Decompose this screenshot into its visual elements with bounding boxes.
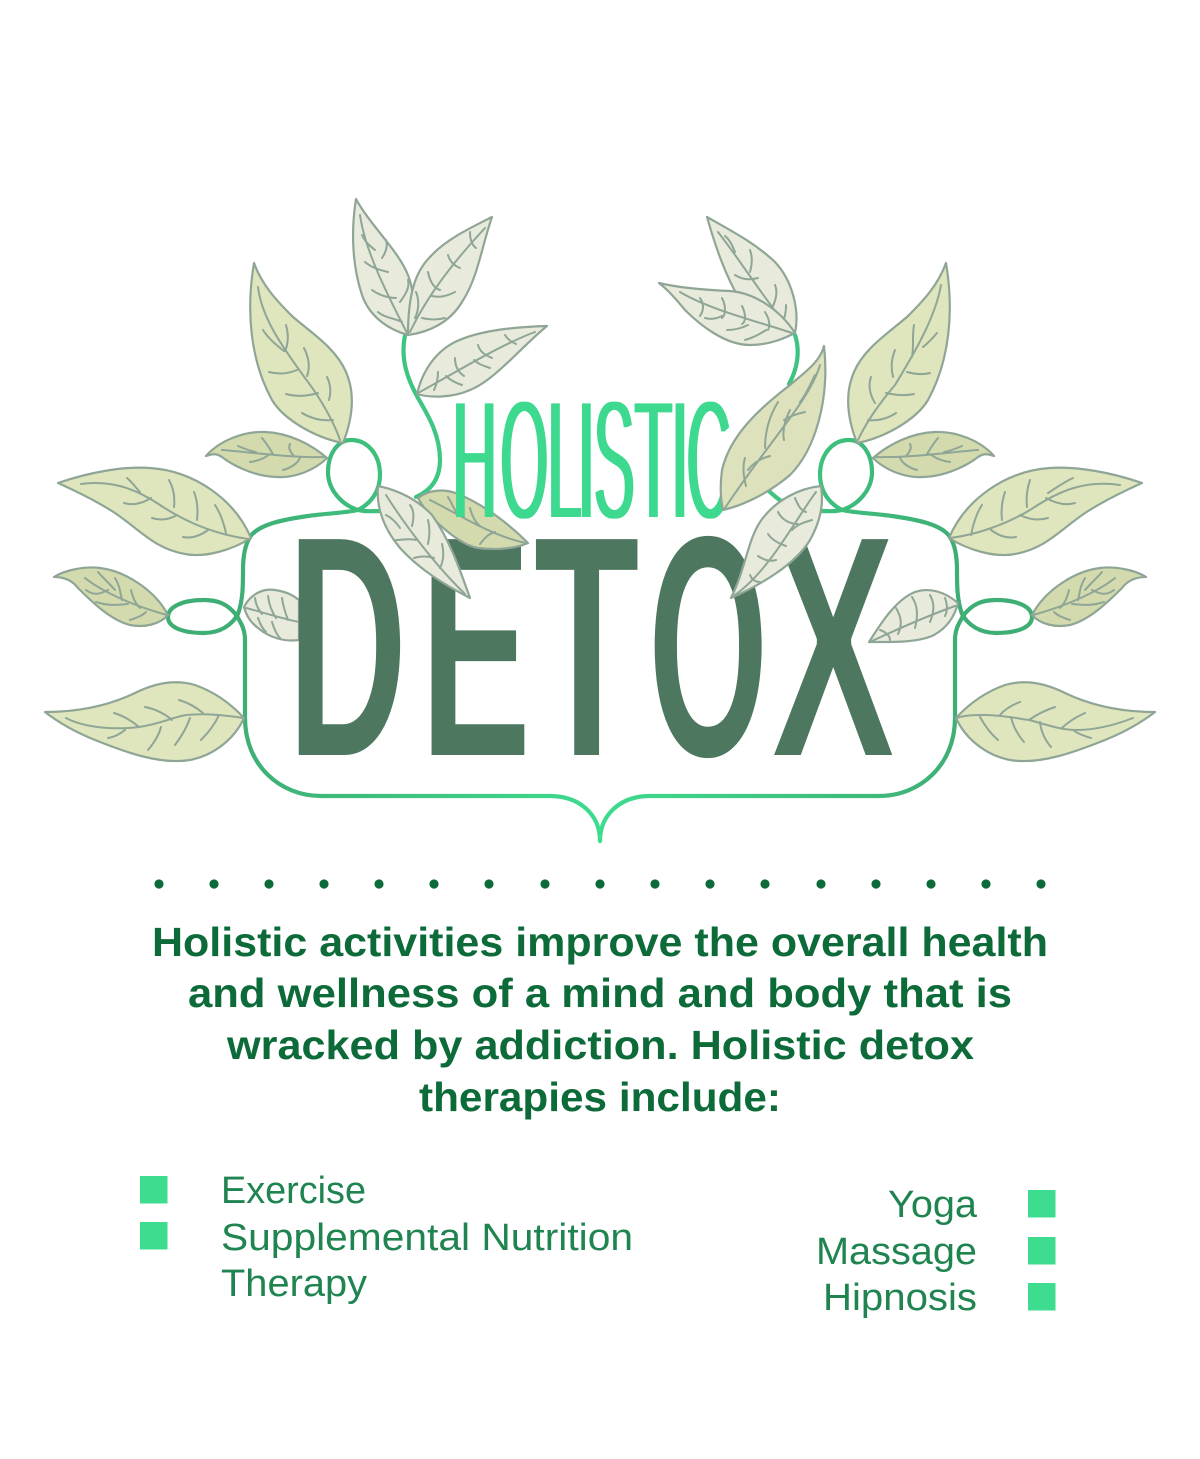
- left list: Therapy: [221, 1263, 367, 1305]
- DETOX wordmark: T: [534, 467, 639, 826]
- intro paragraph: and wellness of a mind and body that is: [188, 970, 1012, 1016]
- leaf: left middle large: [58, 468, 251, 555]
- left list: Exercise: [221, 1170, 366, 1212]
- leaf: top pair left: [353, 199, 492, 335]
- intro paragraph: therapies include:: [419, 1074, 781, 1120]
- leaf: right narrow: [1032, 567, 1146, 626]
- leaf: right middle large: [949, 468, 1142, 555]
- intro paragraph: Holistic activities improve the overall health: [152, 919, 1048, 965]
- leaf: left narrow: [54, 567, 168, 626]
- DETOX wordmark: X: [770, 467, 897, 826]
- HOLISTIC heading: HOLISTIC: [453, 366, 731, 556]
- leaf: right bottom large: [956, 682, 1155, 761]
- left list: [221, 1170, 633, 1305]
- DETOX wordmark: E: [420, 468, 531, 827]
- right list: [816, 1184, 978, 1319]
- leaf: small pale right: [869, 590, 958, 642]
- leaf: left bottom large: [45, 682, 244, 761]
- right list: Massage: [816, 1231, 977, 1273]
- intro paragraph: wracked by addiction. Holistic detox: [226, 1022, 974, 1068]
- right list bullets: [1028, 1190, 1056, 1310]
- intro paragraph: [152, 919, 1048, 1120]
- leaf: top pair right: [659, 217, 796, 345]
- leaf: right upper large: [848, 263, 950, 443]
- right list: Yoga: [888, 1184, 978, 1226]
- DETOX wordmark: D: [288, 468, 407, 827]
- leaf: top left large: [250, 263, 352, 443]
- vine frame: [168, 335, 1032, 841]
- leaf: small pale left: [244, 590, 299, 640]
- leaf: small right upper: [873, 432, 994, 477]
- dotted divider: [154, 879, 1046, 889]
- leaf: top third left: [417, 326, 547, 397]
- left list bullets: [140, 1176, 168, 1250]
- leaf: over DETOX right: [731, 486, 822, 598]
- leaf: over heading right: [721, 346, 825, 510]
- leaf: behind heading lower left: [418, 491, 528, 549]
- right list: Hipnosis: [823, 1277, 977, 1319]
- leaf: small left upper: [206, 432, 327, 477]
- left list: Supplemental Nutrition: [221, 1217, 633, 1259]
- DETOX wordmark: [288, 467, 897, 827]
- DETOX wordmark: O: [648, 468, 768, 826]
- leaf: over DETOX left: [378, 486, 470, 598]
